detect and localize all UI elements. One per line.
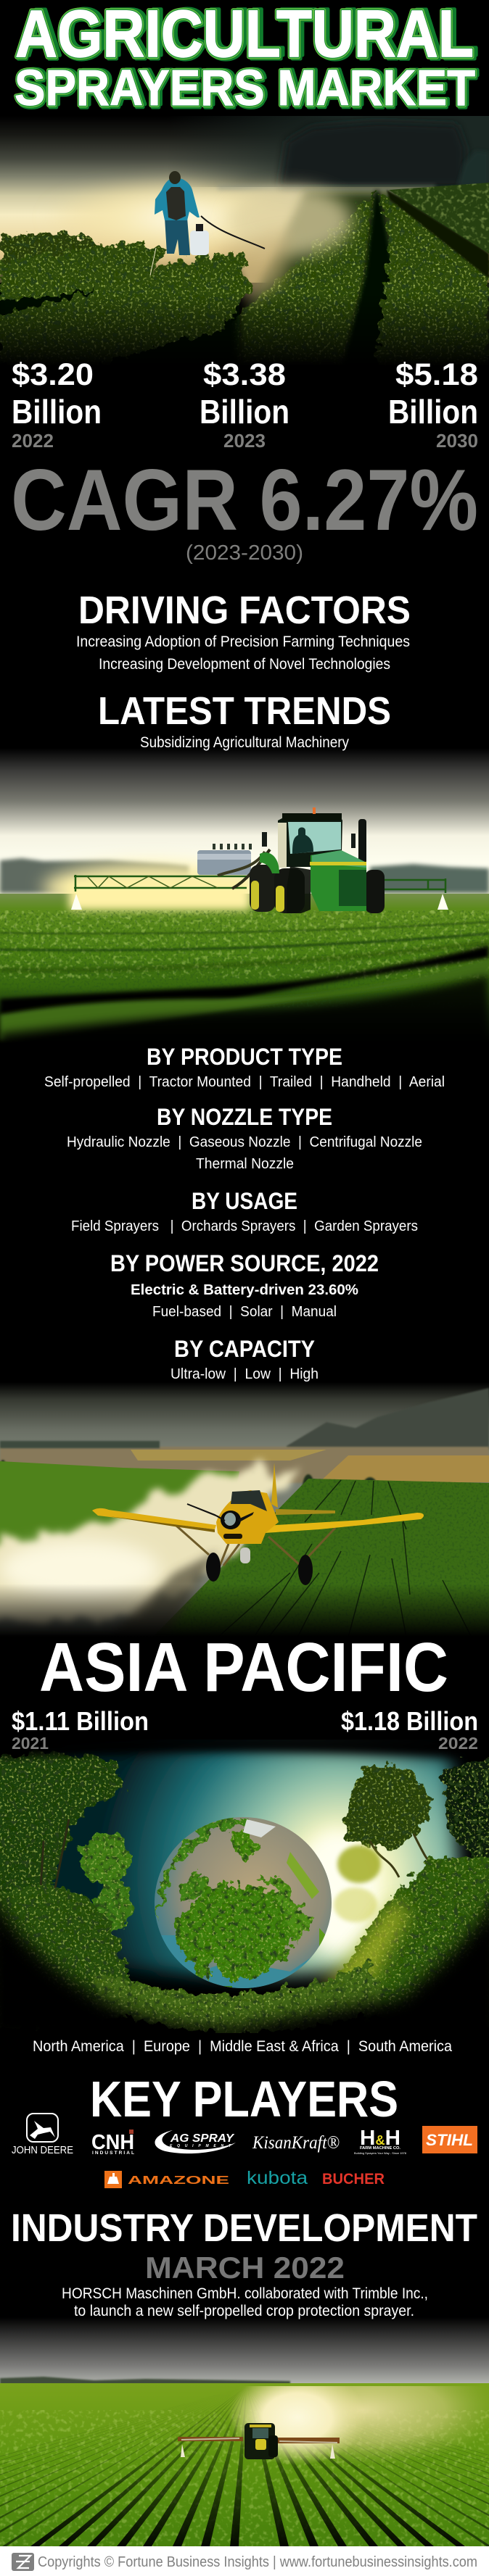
CAGR period: (2023-2030) — [186, 541, 303, 565]
logo: AG Spray Equipment: AG SPRAY — [170, 2132, 234, 2145]
other regions: North America | Europe | Middle East & Africa | South America — [33, 2038, 452, 2055]
by product type — [44, 1044, 445, 1090]
right trees — [290, 1754, 489, 2026]
stat 2030: $5.18 — [395, 357, 478, 392]
image: green globe in forest — [0, 1740, 489, 2044]
regional value 2022 — [341, 1706, 478, 1753]
logo: Bucher: BUCHER — [322, 2171, 385, 2187]
aeroplane — [92, 1463, 424, 1585]
by nozzle type: Thermal Nozzle — [196, 1155, 294, 1172]
by usage — [71, 1188, 418, 1234]
figure: farmer with tank and hose — [150, 171, 265, 275]
by power source: Fuel-based | Solar | Manual — [152, 1303, 337, 1320]
left green field — [0, 1461, 239, 1548]
by product type: Self-propelled | Tractor Mounted | Trailed | Handheld | Aerial — [44, 1073, 445, 1090]
wings — [92, 1508, 216, 1529]
hood — [260, 850, 366, 913]
date: MARCH 2022 — [145, 2251, 345, 2285]
Asia Pacific heading: ASIA PACIFIC — [39, 1629, 448, 1706]
title — [15, 0, 478, 118]
regional value 2022: 2022 — [438, 1734, 478, 1753]
driving factors: Increasing Adoption of Precision Farming Techniques — [76, 633, 410, 650]
distant farmland — [0, 1440, 489, 1486]
icon: Fortune Business Insights logo — [12, 2553, 34, 2571]
by power source: Electric & Battery-driven 23.60% — [131, 1281, 358, 1298]
hero image: farmer spraying crop rows — [0, 116, 489, 370]
logo: Amazone: AMAZONE — [128, 2174, 230, 2187]
field — [0, 2383, 489, 2547]
development description — [62, 2285, 428, 2319]
by capacity: BY CAPACITY — [174, 1336, 315, 1362]
logo: H&H Farm Machine — [354, 2127, 407, 2155]
tractor and boom — [178, 2423, 340, 2459]
regional value 2022: $1.18 Billion — [341, 1706, 478, 1736]
footer band — [0, 2546, 489, 2576]
stat 2023: Billion — [200, 393, 289, 431]
globe — [155, 1817, 332, 1993]
nozzle sprays — [71, 894, 448, 910]
tree line — [0, 2377, 290, 2385]
left trees — [0, 1750, 189, 2029]
latest trends: LATEST TRENDS — [98, 689, 391, 733]
rear wheels — [250, 865, 385, 913]
by nozzle type: BY NOZZLE TYPE — [157, 1104, 332, 1130]
image: tractor spraying large field — [0, 2317, 489, 2547]
logos — [12, 2114, 477, 2188]
engine and propeller — [221, 1511, 241, 1529]
tractor — [71, 807, 448, 913]
logo: AG Spray Equipment — [155, 2130, 236, 2153]
right crop rows — [152, 1479, 489, 1637]
by nozzle type — [67, 1104, 422, 1172]
regional value 2021: $1.11 Billion — [12, 1706, 149, 1736]
by capacity: Ultra-low | Low | High — [170, 1366, 319, 1382]
by nozzle type: Hydraulic Nozzle | Gaseous Nozzle | Centrifugal Nozzle — [67, 1134, 422, 1150]
segmentation — [44, 1044, 445, 1382]
by usage: Field Sprayers | Orchards Sprayers | Garden Sprayers — [71, 1218, 418, 1234]
sprayer tank — [197, 844, 251, 875]
logo: John Deere — [12, 2114, 73, 2156]
logo: H&H Farm Machine: Building Sprayers Your Way - Since 1978 — [354, 2151, 407, 2155]
logo: AG Spray Equipment: EQUIPMENT — [170, 2144, 231, 2148]
landing gear — [176, 1526, 335, 1585]
right spray boom — [382, 878, 446, 893]
logo: Amazone — [104, 2171, 230, 2188]
market value stats — [12, 357, 478, 452]
stat 2023 — [200, 357, 289, 452]
spray cloud — [0, 1470, 301, 1624]
stat 2030: 2030 — [436, 430, 478, 452]
crop rows — [219, 174, 489, 362]
mountains — [287, 1388, 489, 1450]
driving factors: Increasing Development of Novel Technologies — [99, 656, 390, 673]
stat 2022: 2022 — [12, 430, 54, 452]
stat 2023: 2023 — [223, 430, 266, 452]
tree line — [0, 854, 489, 894]
driving factors — [76, 589, 411, 673]
logo: H&H Farm Machine: H&H — [360, 2127, 400, 2150]
stat 2030: Billion — [388, 393, 478, 431]
outer crop furrows — [0, 2386, 489, 2546]
stat 2022: Billion — [12, 393, 102, 431]
stat 2022 — [12, 357, 102, 452]
logo: CNH Industrial: CNH — [91, 2131, 134, 2154]
logo: Kubota: kubota — [247, 2168, 308, 2188]
stat 2030 — [388, 357, 478, 452]
development description: to launch a new self-propelled crop protection sprayer. — [74, 2303, 414, 2319]
spray cloud — [181, 2386, 489, 2493]
foliage ground — [94, 1964, 385, 2033]
exhaust — [358, 819, 366, 864]
stat 2023: $3.38 — [203, 357, 286, 392]
logo: H&H Farm Machine: FARM MACHINE CO. — [360, 2146, 400, 2151]
logo: Stihl: STIHL — [426, 2131, 473, 2149]
regional value 2021: 2021 — [12, 1734, 49, 1753]
left foreground bushes — [0, 233, 250, 370]
by product type: BY PRODUCT TYPE — [147, 1044, 342, 1070]
by power source: BY POWER SOURCE, 2022 — [110, 1250, 379, 1276]
image: crop-dusting aeroplane — [0, 1382, 489, 1638]
key players heading: KEY PLAYERS — [90, 2071, 398, 2127]
logo: John Deere: JOHN DEERE — [12, 2144, 73, 2156]
stat 2022: $3.20 — [12, 357, 94, 392]
regional value 2021 — [12, 1706, 149, 1753]
vignette edges — [0, 1740, 489, 2044]
by capacity — [170, 1336, 319, 1382]
by power source — [110, 1250, 379, 1320]
logo: CNH Industrial: INDUSTRIAL — [92, 2151, 134, 2156]
tail — [271, 1463, 278, 1508]
driving factors: DRIVING FACTORS — [78, 589, 411, 632]
industry development — [11, 2206, 477, 2319]
latest trends — [98, 689, 391, 751]
inner crop furrows — [30, 2386, 465, 2546]
latest trends: Subsidizing Agricultural Machinery — [140, 734, 349, 751]
sky — [29, 1748, 464, 1975]
logo: KisanKraft: KisanKraft® — [252, 2133, 340, 2153]
left spray boom — [74, 849, 270, 892]
logo: Stihl — [422, 2126, 477, 2153]
cab — [262, 807, 356, 868]
image: tractor with sprayer boom — [0, 748, 489, 1045]
development description: HORSCH Maschinen GmbH. collaborated with Trimble Inc., — [62, 2285, 428, 2302]
by usage: BY USAGE — [192, 1188, 297, 1214]
field — [0, 881, 489, 1045]
fuselage — [216, 1490, 279, 1544]
